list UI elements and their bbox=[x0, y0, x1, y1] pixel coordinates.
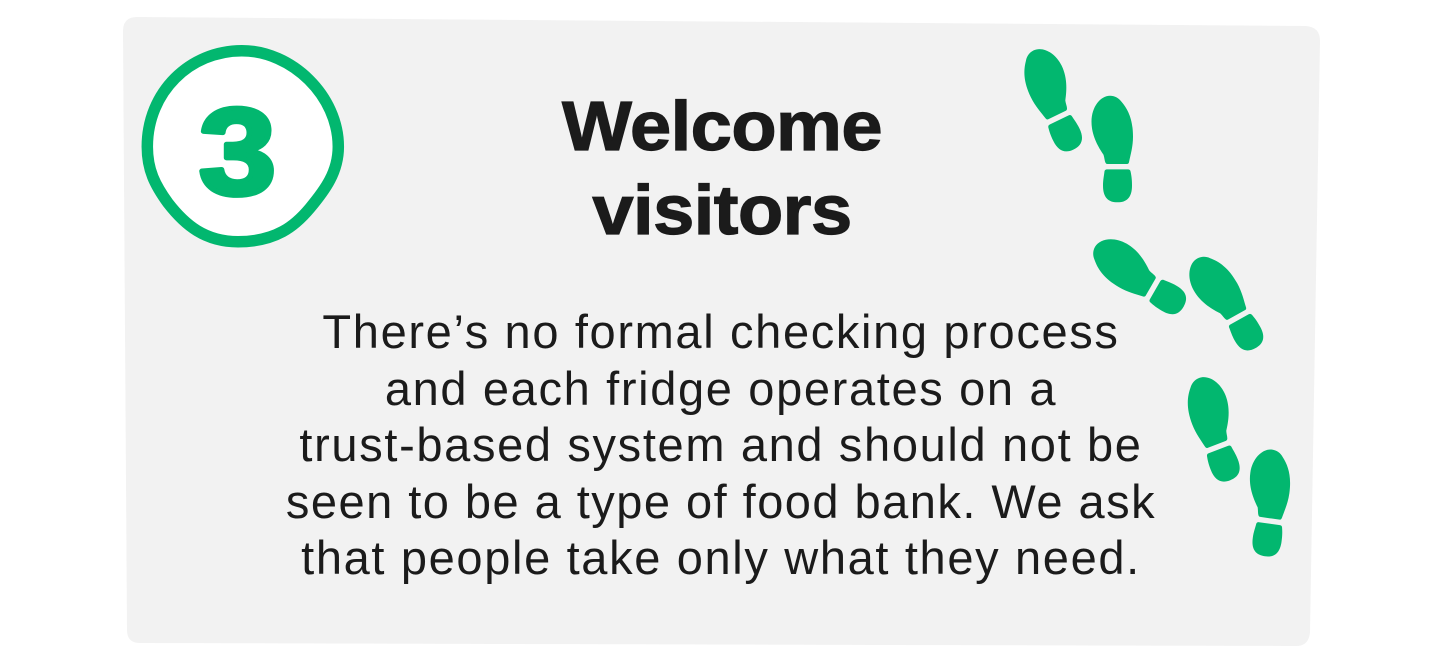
icon: number 3 badge: 3 bbox=[199, 82, 276, 220]
body text: that people take only what they need. bbox=[301, 531, 1141, 584]
heading: visitors bbox=[592, 171, 851, 249]
heading bbox=[561, 87, 882, 249]
footprint pair 1 bbox=[1013, 42, 1133, 202]
body text bbox=[286, 305, 1156, 584]
body text: trust-based system and should not be bbox=[299, 418, 1143, 471]
body text: and each fridge operates on a bbox=[385, 362, 1057, 414]
body text: seen to be a type of food bank. We ask bbox=[286, 474, 1156, 528]
body text: There’s no formal checking process bbox=[322, 305, 1120, 358]
footprint pair 3 bbox=[1178, 371, 1295, 558]
heading: Welcome bbox=[561, 87, 882, 165]
footprint pair 2 bbox=[1084, 231, 1269, 361]
